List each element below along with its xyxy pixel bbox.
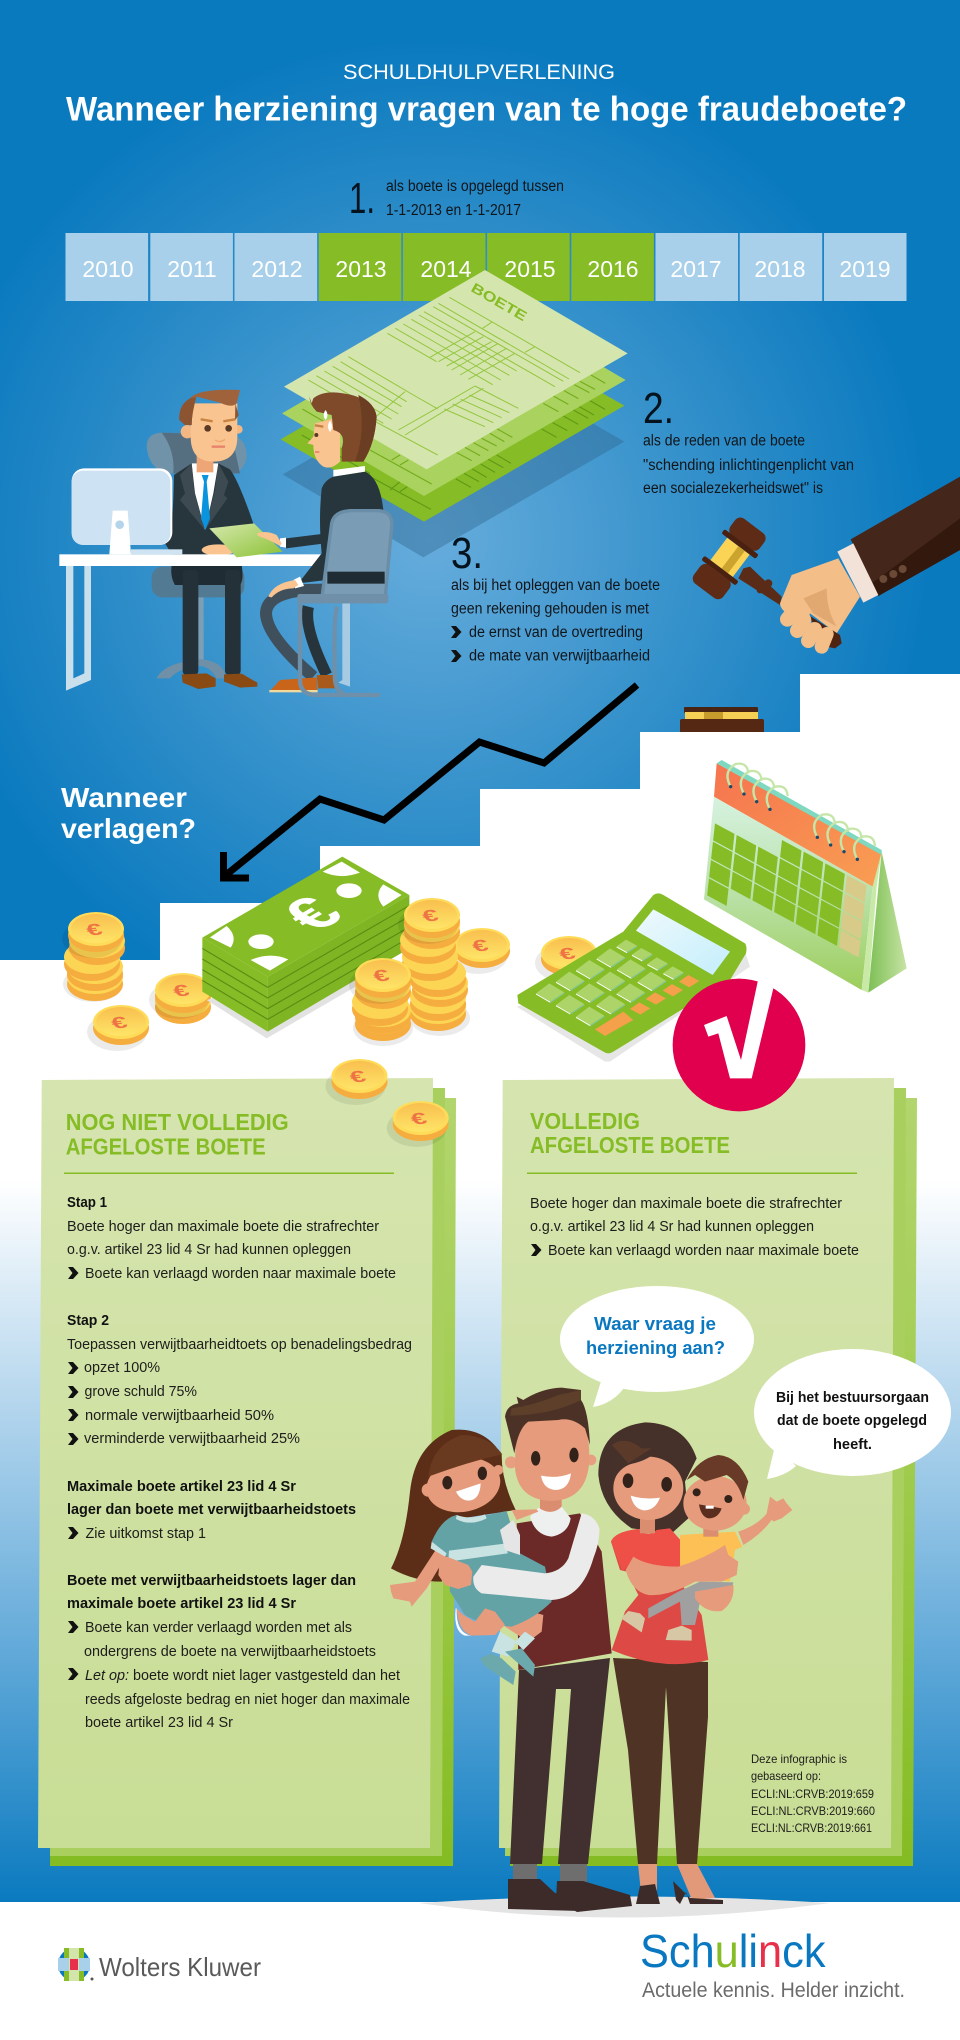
year timeline: 2016 bbox=[587, 256, 639, 282]
logo: Wolters Kluwer: Wolters Kluwer bbox=[99, 1952, 261, 1982]
boete met toets lager: Boete kan verder verlaagd worden met als bbox=[85, 1620, 352, 1636]
mother upper body bbox=[598, 1422, 708, 1664]
speech bubble: question bbox=[560, 1286, 754, 1407]
advisor bbox=[165, 390, 257, 689]
stap 2 bbox=[67, 1313, 412, 1447]
source note: ECLI:NL:CRVB:2019:660 bbox=[751, 1804, 875, 1818]
year timeline: 2012 bbox=[251, 256, 303, 282]
panel body: Boete hoger dan maximale boete die strafrechter bbox=[530, 1196, 842, 1212]
panel heading bbox=[64, 1109, 394, 1174]
stap 2: normale verwijtbaarheid 50% bbox=[85, 1408, 274, 1424]
speech bubble: question: herziening aan? bbox=[586, 1338, 725, 1358]
speech bubble: answer: heeft. bbox=[833, 1437, 872, 1453]
source note: gebaseerd op: bbox=[751, 1769, 821, 1783]
lower fading background bbox=[0, 1100, 960, 1902]
coin stack far left bbox=[62, 912, 125, 1002]
criterion 1 text: als boete is opgelegd tussen bbox=[386, 178, 564, 195]
criterion 3 text: de mate van verwijtbaarheid bbox=[469, 648, 650, 665]
speech bubble: question: Waar vraag je bbox=[594, 1314, 716, 1334]
speech bubble: answer: Bij het bestuursorgaan bbox=[776, 1390, 929, 1406]
stap 1: Boete kan verlaagd worden naar maximale boete bbox=[85, 1266, 396, 1282]
logo: Schulinck bbox=[640, 1925, 905, 2002]
year timeline: 2010 bbox=[82, 256, 134, 282]
document handed over bbox=[209, 523, 283, 557]
white stairs bbox=[0, 674, 960, 1100]
maximale boete lager: lager dan boete met verwijtbaarheidstoets bbox=[67, 1502, 356, 1518]
year timeline: 2013 bbox=[335, 256, 387, 282]
criterion 3 text: de ernst van de overtreding bbox=[469, 624, 643, 641]
year timeline bbox=[66, 233, 906, 301]
stap 1 bbox=[67, 1195, 396, 1282]
chair of advisor bbox=[147, 433, 247, 678]
illustration: desk calendar bbox=[704, 760, 907, 993]
illustration: advisor at desk with client bbox=[59, 390, 392, 695]
criterion 2 text bbox=[643, 384, 854, 497]
kicker: SCHULDHULPVERLENING bbox=[343, 61, 615, 84]
year timeline: 2018 bbox=[754, 256, 806, 282]
criterion 3 text: geen rekening gehouden is met bbox=[451, 600, 650, 618]
boete met toets lager: reeds afgeloste bedrag en niet hoger dan maximale bbox=[85, 1692, 410, 1708]
panel heading: AFGELOSTE BOETE bbox=[66, 1133, 266, 1159]
source note bbox=[751, 1752, 875, 1835]
boete met toets lager: maximale boete artikel 23 lid 4 Sr bbox=[67, 1596, 296, 1612]
coin stacks centre bbox=[349, 898, 470, 1046]
heading bbox=[66, 61, 907, 128]
calculator keys bbox=[536, 940, 699, 1036]
descending arrow bbox=[224, 685, 637, 878]
ground shadow bbox=[419, 1896, 830, 1918]
monitor bbox=[72, 468, 182, 554]
blue background bbox=[0, 0, 960, 970]
criterion 3 text: 3. bbox=[451, 529, 483, 578]
section heading: Wanneer verlagen: verlagen? bbox=[61, 813, 196, 844]
section heading: Wanneer verlagen bbox=[61, 782, 196, 844]
stap 2: Stap 2 bbox=[67, 1313, 109, 1329]
panel: nog niet volledig afgeloste boete bbox=[38, 1078, 456, 1866]
stap 2: opzet 100% bbox=[84, 1360, 160, 1376]
criterion 1 text: 1-1-2013 en 1-1-2017 bbox=[386, 202, 521, 219]
maximale boete lager: Zie uitkomst stap 1 bbox=[86, 1526, 206, 1542]
boete met toets lager: Let op: boete wordt niet lager vastgesteld dan het bbox=[85, 1668, 400, 1684]
illustration: banknote stack: € bbox=[267, 888, 359, 940]
year timeline: 2014 bbox=[420, 256, 472, 282]
panel heading: VOLLEDIG bbox=[530, 1108, 640, 1134]
panel heading: NOG NIET VOLLEDIG bbox=[66, 1109, 289, 1135]
year timeline: 2019 bbox=[839, 256, 891, 282]
criterion 2 text: een socialezekerheidswet" is bbox=[643, 480, 823, 497]
loose coin behind calculator bbox=[535, 936, 597, 982]
boete met toets lager bbox=[67, 1573, 410, 1731]
speech bubble: answer bbox=[754, 1349, 951, 1479]
year timeline: 2011 bbox=[167, 256, 217, 282]
source note: ECLI:NL:CRVB:2019:659 bbox=[751, 1787, 874, 1801]
stap 2: verminderde verwijtbaarheid 25% bbox=[84, 1431, 300, 1447]
logo: Wolters Kluwer bbox=[58, 1948, 261, 1982]
boete met toets lager: Boete met verwijtbaarheidstoets lager dan bbox=[67, 1573, 356, 1589]
panel body: Boete kan verlaagd worden naar maximale boete bbox=[548, 1243, 859, 1259]
criterion 3 text bbox=[451, 529, 660, 665]
icon: red check badge bbox=[673, 979, 805, 1111]
source note: Deze infographic is bbox=[751, 1752, 847, 1766]
mother's legs and shoes bbox=[613, 1658, 723, 1904]
criterion 3 text: als bij het opleggen van de boete bbox=[451, 577, 660, 594]
father's arms bbox=[438, 1513, 599, 1636]
stap 2: Toepassen verwijtbaarheidtoets op benadelingsbedrag bbox=[67, 1337, 412, 1353]
illustration: banknote stack bbox=[202, 857, 409, 1038]
boete met toets lager: ondergrens de boete na verwijtbaarheidstoets bbox=[84, 1644, 376, 1660]
document label: BOETE bbox=[468, 279, 530, 324]
mother's arms bbox=[626, 1545, 738, 1611]
panel body bbox=[530, 1196, 859, 1259]
coins on left panel bbox=[326, 1059, 449, 1147]
illustration: stacked fine documents bbox=[281, 270, 628, 557]
maximale boete lager bbox=[67, 1479, 356, 1542]
calculator screen bbox=[636, 909, 730, 975]
panel heading: AFGELOSTE BOETE bbox=[530, 1132, 730, 1158]
source note: ECLI:NL:CRVB:2019:661 bbox=[751, 1821, 872, 1835]
stap 2: grove schuld 75% bbox=[84, 1384, 197, 1400]
gavel sound block bbox=[680, 707, 764, 733]
criterion 2 text: "schending inlichtingenplicht van bbox=[643, 457, 854, 474]
stap 1: Stap 1 bbox=[67, 1195, 107, 1211]
year timeline: 2015 bbox=[504, 256, 556, 282]
client chair bbox=[297, 511, 392, 695]
section heading: Wanneer verlagen: Wanneer bbox=[61, 782, 187, 813]
maximale boete lager: Maximale boete artikel 23 lid 4 Sr bbox=[67, 1479, 296, 1495]
client bbox=[257, 392, 385, 692]
illustration: hand with gavel bbox=[688, 477, 960, 648]
father upper body bbox=[505, 1388, 612, 1670]
desk top bbox=[59, 554, 324, 566]
boete met toets lager: boete artikel 23 lid 4 Sr bbox=[85, 1715, 233, 1731]
criterion 1 text bbox=[349, 174, 564, 223]
stap 1: Boete hoger dan maximale boete die strafrechter bbox=[67, 1219, 379, 1235]
criterion 2 text: 2. bbox=[643, 384, 674, 433]
left and right desk legs bbox=[66, 566, 350, 691]
girl bbox=[390, 1430, 552, 1685]
illustration: family bbox=[390, 1388, 792, 1912]
panel: volledig afgeloste boete bbox=[499, 1078, 917, 1866]
title: Wanneer herziening vragen van te hoge fraudeboete? bbox=[66, 90, 907, 128]
speech bubble: answer: dat de boete opgelegd bbox=[777, 1413, 927, 1429]
logo: Schulinck: Actuele kennis. Helder inzicht. bbox=[642, 1979, 905, 2002]
stap 1: o.g.v. artikel 23 lid 4 Sr had kunnen opleggen bbox=[67, 1242, 351, 1258]
panel body: o.g.v. artikel 23 lid 4 Sr had kunnen opleggen bbox=[530, 1219, 814, 1235]
year timeline: 2017 bbox=[670, 256, 722, 282]
illustration: calculator bbox=[517, 893, 750, 1062]
logo: Schulinck: Schulinck bbox=[640, 1925, 826, 1977]
loose coins left bbox=[87, 973, 211, 1051]
father's legs and shoes bbox=[508, 1658, 632, 1912]
panel heading bbox=[527, 1108, 857, 1174]
upper bodies bbox=[390, 1388, 792, 1685]
criterion 2 text: als de reden van de boete bbox=[643, 432, 805, 450]
coin behind stacks bbox=[448, 928, 510, 974]
boy bbox=[621, 1455, 792, 1641]
criterion 1 text: 1. bbox=[349, 174, 375, 223]
